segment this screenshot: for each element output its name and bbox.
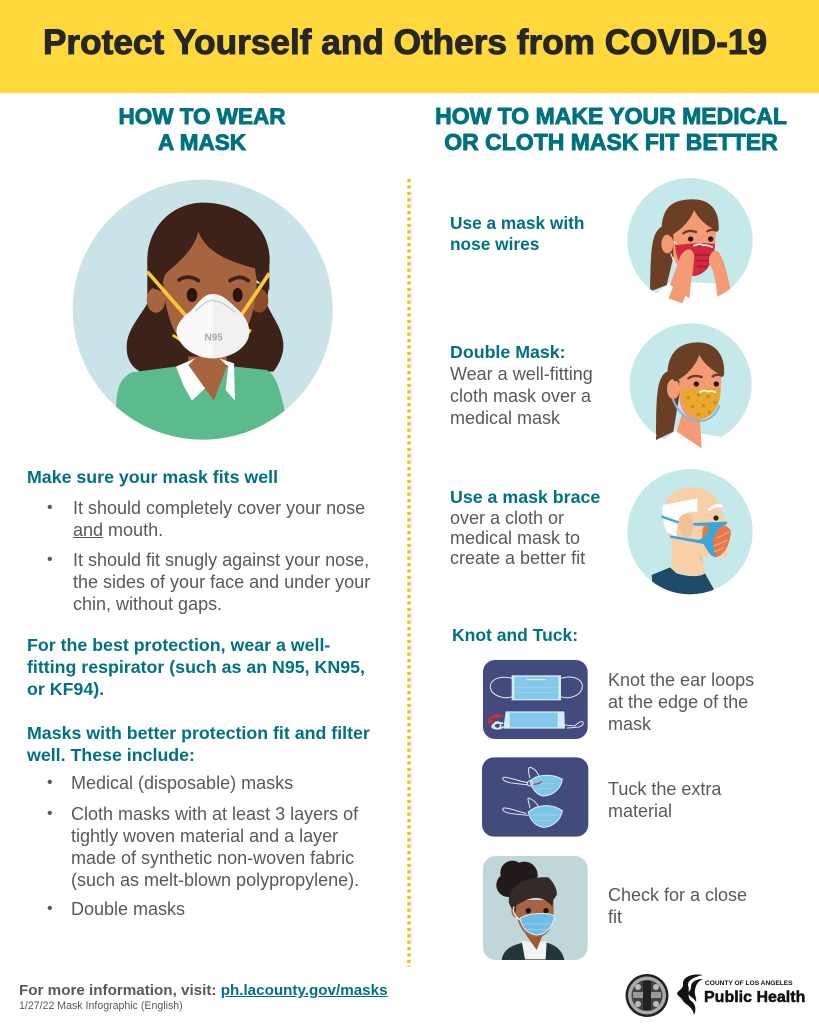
heading: how to make your mask fit better: HOW TO MAKE YOUR MEDICAL [435, 103, 787, 129]
bullet list: mask types: Medical (disposable) masks Cloth masks with at least 3 layers of [71, 773, 358, 824]
text: • [47, 774, 53, 791]
icon: man wearing mask brace [627, 469, 753, 594]
footer: document date: 1/27/22 Mask Infographic (English) [19, 1000, 183, 1012]
text: use a mask brace [450, 487, 600, 568]
icon: woman adjusting red mask with nose wire [627, 178, 753, 304]
heading: how to wear a mask [118, 104, 286, 154]
logo: public health: COUNTY OF LOS ANGELES [705, 980, 793, 987]
bullet list: mask types: made of synthetic non-woven fabric [71, 848, 354, 868]
text: double mask: Double Mask: [450, 342, 566, 362]
text: • [47, 805, 53, 822]
dotted divider [407, 179, 411, 967]
text: use a mask brace: Use a mask brace [450, 487, 600, 507]
heading: how to wear a mask: A MASK [158, 130, 246, 154]
text block: masks with better protection [27, 723, 370, 765]
text: • [47, 551, 53, 568]
bullet list: fit guidance: chin, without gaps. [73, 594, 222, 614]
illustration: woman wearing N95 [72, 180, 333, 440]
bullet list: mask types [47, 773, 359, 919]
text: double mask: medical mask [450, 408, 560, 428]
text block: best protection: For the best protection, wear a well- [27, 635, 330, 655]
text: double mask: Wear a well-fitting [450, 364, 593, 384]
text: knot the ear loops: Knot the ear loops [608, 670, 754, 690]
text: use a mask with nose wires [450, 213, 584, 254]
illustration: woman wearing N95: N95 [204, 333, 223, 344]
title: Protect Yourself and Others from COVID-19 [43, 23, 767, 62]
icon: woman wearing double mask [630, 323, 752, 448]
text: double mask [450, 342, 593, 428]
text: use a mask brace: medical mask to [450, 528, 580, 548]
text: use a mask brace: over a cloth or [450, 508, 564, 528]
text: • [47, 499, 53, 516]
heading: knot and tuck: Knot and Tuck: [452, 625, 578, 645]
text: check for a close fit: fit [608, 907, 622, 927]
text: use a mask with nose wires: Use a mask with [450, 213, 584, 233]
text: use a mask brace: create a better fit [450, 548, 585, 568]
text: check for a close fit [608, 885, 747, 927]
logo: public health [677, 974, 805, 1015]
text: tuck the extra material: Tuck the extra [608, 779, 721, 799]
bullet list: fit guidance: It should completely cover your nose [73, 498, 365, 518]
header band [0, 0, 819, 93]
text block: best protection: or KF94). [27, 679, 104, 699]
text block: best protection [27, 635, 365, 699]
text: tuck the extra material: material [608, 801, 672, 821]
bullet list: fit guidance: the sides of your face and under your [73, 572, 370, 592]
text: check for a close fit: Check for a close [608, 885, 747, 905]
text block: masks with better protection: well. These include: [27, 745, 195, 765]
logo: public health: Public Health [704, 989, 805, 1006]
text: knot the ear loops: at the edge of the [608, 692, 748, 712]
text: • [47, 900, 53, 917]
text: tuck the extra material [608, 779, 722, 821]
card: check for a close fit [483, 856, 588, 960]
bullet list: mask types: tightly woven material and a layer [71, 826, 338, 846]
text block: masks with better protection: Masks with better protection fit and filter [27, 723, 370, 743]
text block: best protection: fitting respirator (such as an N95, KN95, [27, 657, 365, 677]
text: double mask: cloth mask over a [450, 386, 591, 406]
bullet list: mask types: (such as melt-blown polypropylene). Double masks [71, 870, 359, 919]
text: knot the ear loops: mask [608, 714, 651, 734]
logo: county seal [626, 974, 668, 1017]
bullet list: fit guidance: and mouth. It should fit snugly against your nose, [73, 520, 369, 570]
card: knot ear loops [483, 660, 588, 739]
bullet list: fit guidance [47, 498, 370, 614]
heading: how to make your mask fit better: OR CLOTH MASK FIT BETTER [444, 128, 778, 154]
text: knot the ear loops [608, 670, 754, 734]
card: tuck the extra material [482, 757, 588, 837]
footer: more information link: For more information, visit: ph.lacounty.gov/masks [19, 982, 388, 999]
heading: how to make your mask fit better [435, 103, 787, 154]
text: use a mask with nose wires: nose wires [450, 234, 539, 254]
heading: how to wear a mask: HOW TO WEAR [118, 104, 286, 129]
text block: make sure your mask fits well: Make sure your mask fits well [27, 467, 278, 487]
